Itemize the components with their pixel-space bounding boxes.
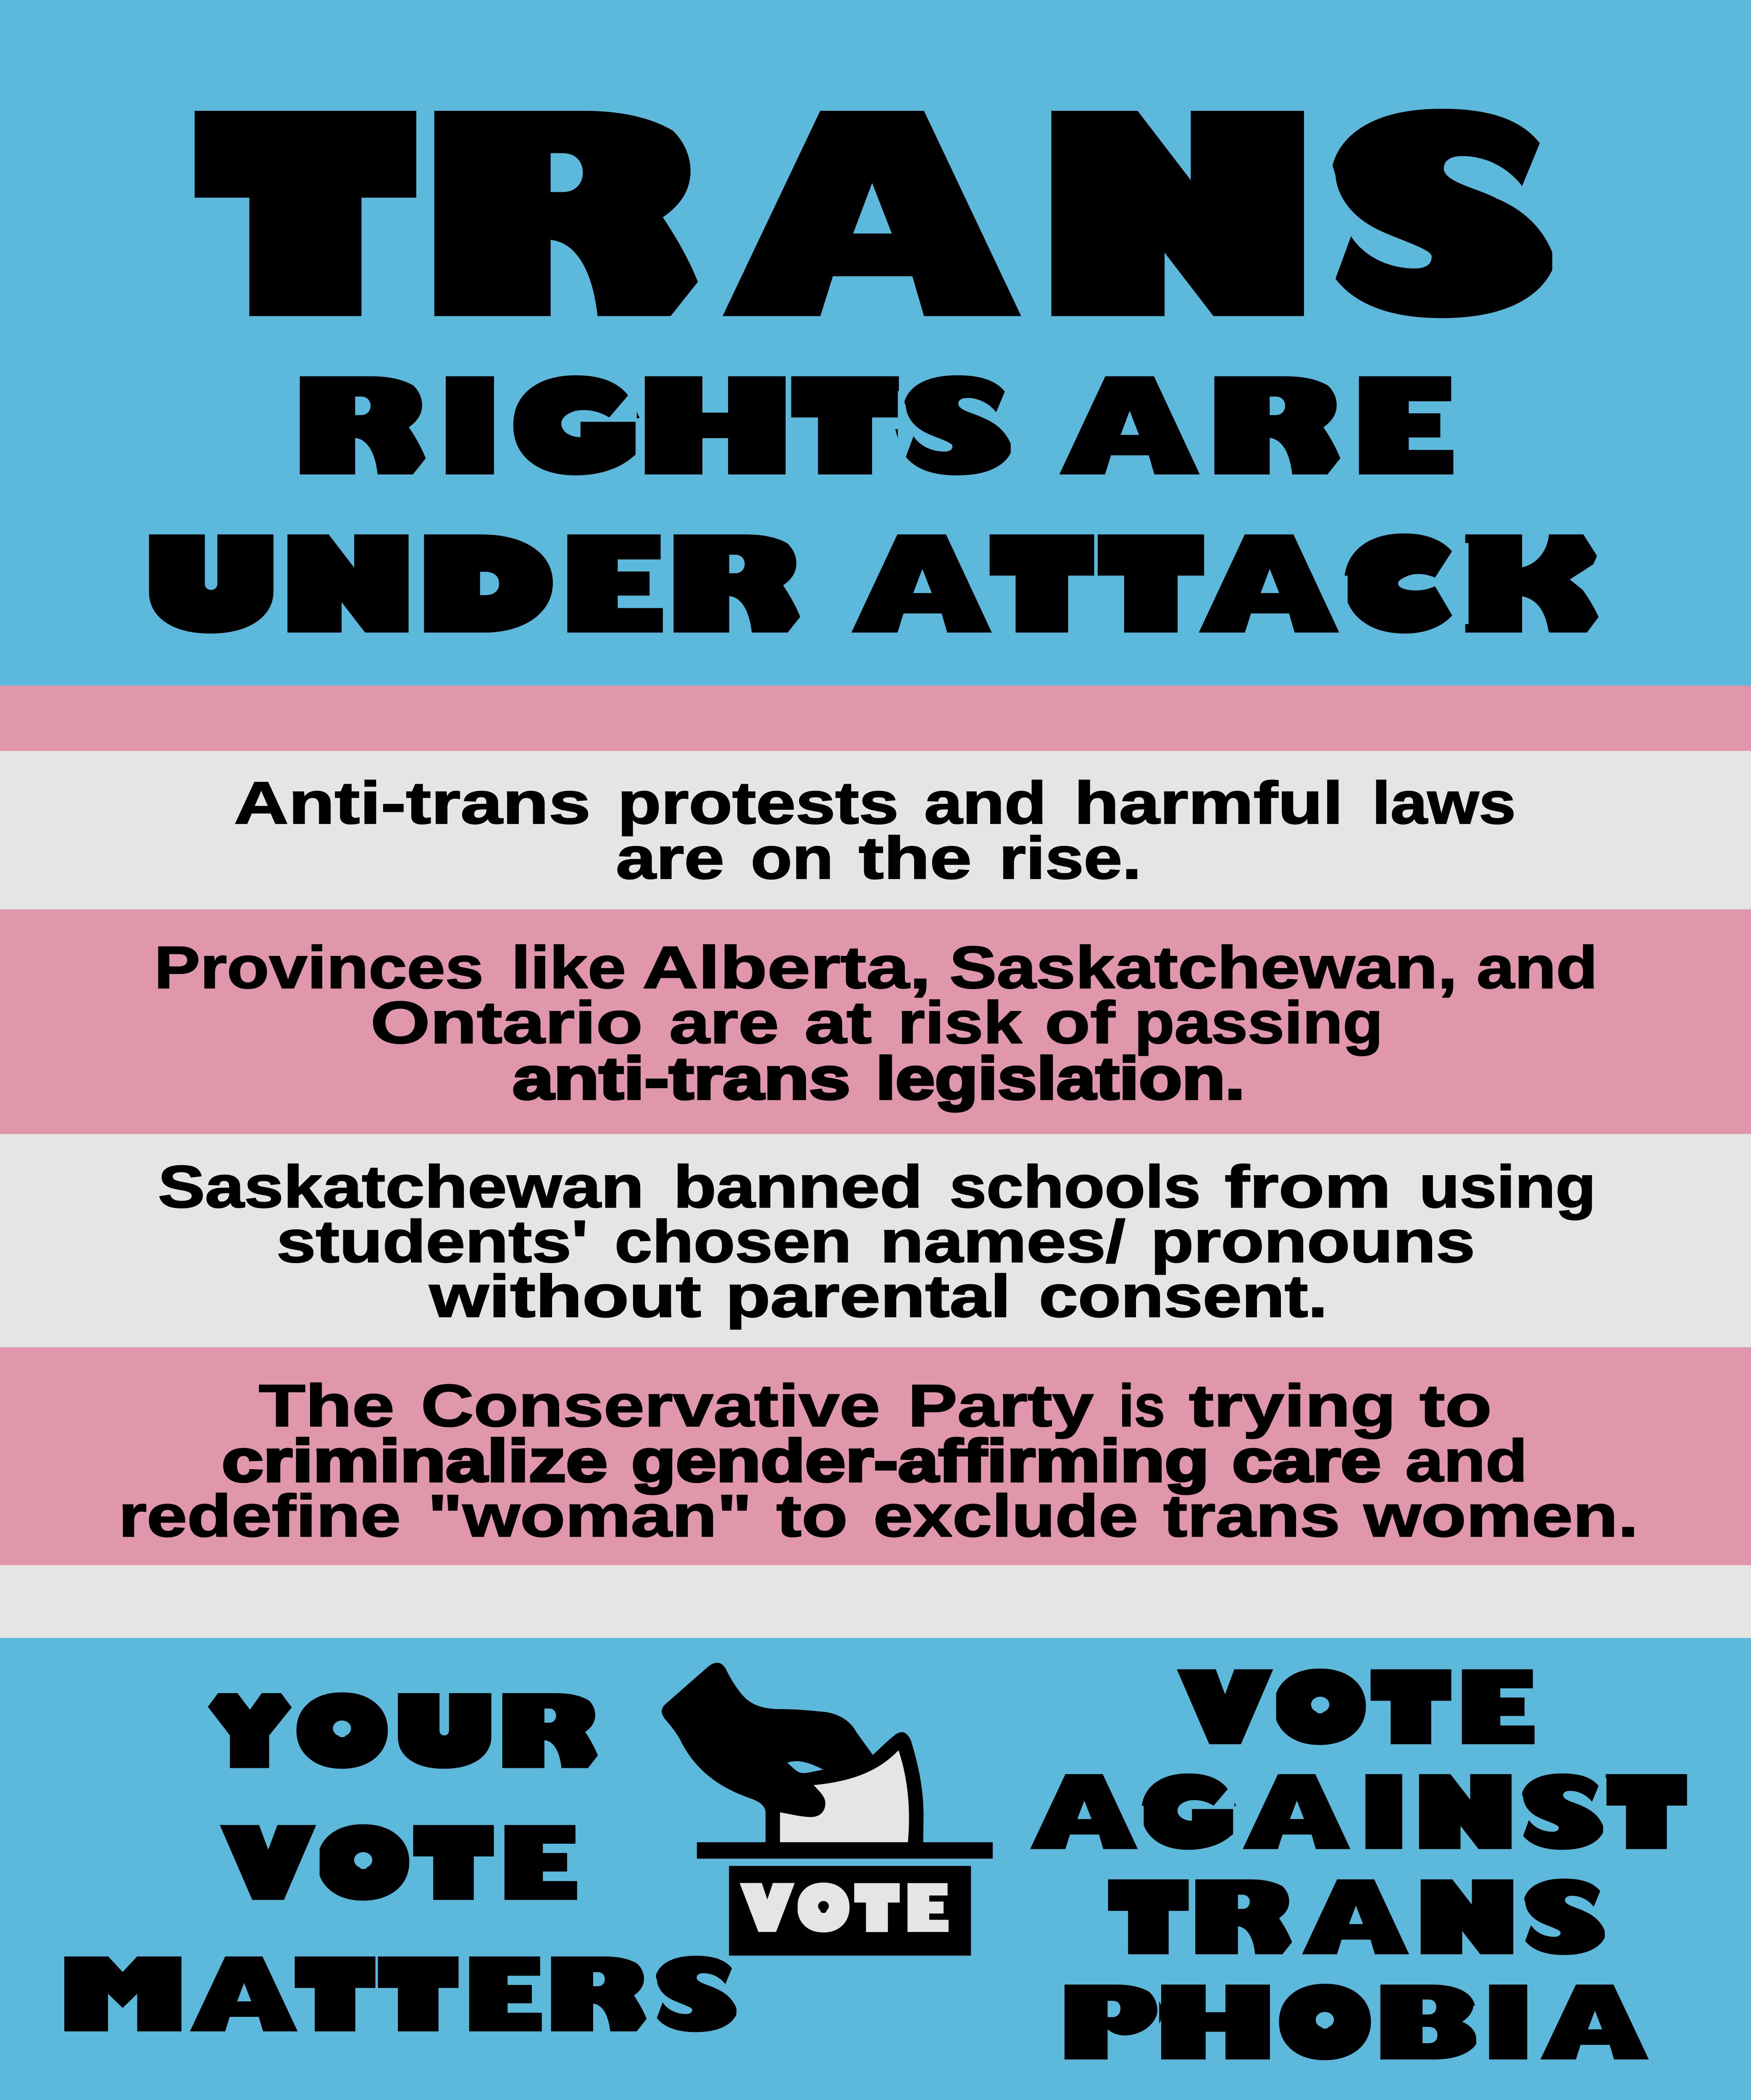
heading: vote against transphobia: S [1530,1769,1594,1853]
text: provinces line 3 emphasis: anti-trans [513,1045,850,1111]
text: conservative line 3: to [776,1482,848,1549]
title: TRANS: A [776,98,969,328]
icon: hand casting ballot into box: V [749,1879,785,1936]
text: provinces line 2: risk [898,989,1022,1056]
text: conservative line 2: criminalize [222,1427,607,1494]
heading: your vote matters: T [308,1952,363,2036]
title: TRANS: N [1076,98,1279,328]
heading: under attack: D [436,528,537,638]
text: provinces line 2: of [1045,989,1115,1056]
heading: vote against transphobia: O [1284,1664,1356,1749]
heading: under attack: U [162,528,261,638]
text: provinces line 1: and [1477,934,1598,1000]
title: TRANS [230,98,1566,328]
panel: saskatchewan ban [0,1134,1751,1347]
heading: your vote matters: Y [216,1688,283,1773]
text: provinces line 2: passing [1134,989,1383,1056]
text: protests line 1: laws [1372,769,1516,836]
heading: your vote matters: A [209,1952,279,2036]
heading: vote against transphobia [1025,1664,1674,2064]
heading: rights are: E [1368,370,1441,480]
heading: under attack: T [1006,528,1078,638]
heading: your vote matters [74,1688,741,2036]
heading: vote against transphobia: R [1205,1874,1285,1959]
text: protests line 2: rise. [999,824,1141,891]
panel: provinces at risk [0,909,1751,1134]
heading: vote against transphobia: S [1532,1874,1596,1959]
title: TRANS: S [1355,98,1528,328]
text: protests line 1: harmful [1074,769,1343,836]
heading: under attack: E [577,528,650,638]
heading: vote against transphobia: A [1559,1979,1630,2064]
heading: vote against transphobia: N [1430,1874,1504,1959]
heading: vote against transphobia: E [1469,1664,1525,1749]
heading: vote against transphobia: B [1390,1979,1468,2064]
heading: vote against transphobia: H [1172,1979,1259,2064]
text: protests line 2: the [859,824,972,891]
text: saskatchewan line 3: without [429,1263,701,1329]
title: TRANS: T [230,98,381,328]
heading: rights are: S [915,370,999,480]
heading: your vote matters: V [239,1820,297,1904]
text: provinces line 2: are [669,989,779,1056]
text: conservative line 1: The [259,1372,394,1439]
heading: under attack: K [1478,528,1588,638]
icon: hand casting ballot into box: E [911,1879,944,1936]
heading: under attack: R [686,528,791,638]
heading: vote against transphobia: O [1289,1979,1361,2064]
heading: rights are: I [455,370,485,480]
text: saskatchewan line 3: parental [726,1263,1011,1329]
heading: rights are: R [1227,370,1330,480]
text: conservative line 1: trying [1189,1372,1396,1439]
text: conservative line 3: women. [1363,1482,1638,1549]
text: saskatchewan line 1: Saskatchewan [158,1153,644,1220]
heading: vote against transphobia: A [1321,1874,1391,1959]
text: saskatchewan line 1: banned [673,1153,923,1220]
text: conservative line 3: "woman" [428,1482,752,1549]
heading: your vote matters: U [408,1688,482,1773]
text: conservative line 1: is [1119,1372,1165,1439]
panel: conservative party [0,1347,1751,1565]
band: pink spacer stripe [0,685,1751,751]
text: saskatchewan line 2: pronouns [1151,1208,1475,1275]
text: provinces line 1: Provinces [154,934,484,1000]
heading: vote against transphobia: P [1074,1979,1149,2064]
text: provinces line 3 emphasis: legislation. [876,1045,1245,1111]
text: protests line 2: are [616,824,724,891]
icon: hand casting ballot into box [662,1663,993,1956]
text: conservative line 3: redefine [118,1482,401,1549]
heading: vote against transphobia: A [1262,1769,1332,1853]
heading: under attack: T [1115,528,1187,638]
heading: rights are: R [312,370,416,480]
text: provinces line 2: Ontario [371,989,643,1056]
heading: your vote matters: S [664,1952,728,2036]
heading: under attack: A [1223,528,1315,638]
heading: under attack [162,528,1625,638]
text: conservative line 1: Conservative [421,1372,880,1439]
text: protests line 1: Anti-trans [234,769,591,836]
text: provinces line 1: Alberta, [642,934,931,1000]
heading: vote against transphobia: T [1121,1874,1176,1959]
text: conservative line 3: exclude [873,1482,1138,1549]
icon: hand casting ballot into box: O [802,1879,844,1936]
text: conservative line 3: trans [1163,1482,1340,1549]
heading: under attack: C [1358,528,1446,638]
text: provinces line 1: like [511,934,626,1000]
text: conservative line 2: gender-affirming [631,1427,1209,1494]
heading: vote against transphobia: T [1383,1664,1438,1749]
heading: your vote matters: O [307,1688,378,1773]
text: conservative line 1: to [1420,1372,1492,1439]
heading: vote against transphobia: G [1152,1769,1225,1853]
panel: call to action [0,1638,1751,2100]
heading: your vote matters: M [74,1952,171,2036]
heading: your vote matters: E [512,1820,568,1904]
heading: vote against transphobia: I [1372,1769,1395,1853]
text: protests line 1: and [924,769,1046,836]
heading: vote against transphobia: T [1619,1769,1674,1853]
title: TRANS: R [461,98,677,328]
text: conservative line 2: and [1405,1427,1528,1494]
heading: your vote matters: O [328,1820,399,1904]
text: conservative line 2: care [1232,1427,1381,1494]
text: saskatchewan line 3: consent. [1039,1263,1328,1329]
text: saskatchewan line 1: using [1419,1153,1596,1220]
heading: rights are: G [527,370,624,480]
heading: your vote matters: E [476,1952,532,2036]
text: saskatchewan line 2: students' [276,1208,588,1275]
heading: rights are [312,370,1456,480]
text: provinces line 1: Saskatchewan, [949,934,1457,1000]
heading: vote against transphobia: A [1049,1769,1119,1853]
text: saskatchewan line 2: names/ [880,1208,1125,1275]
panel: headline [0,0,1751,685]
heading: vote against transphobia: I [1496,1979,1520,2064]
heading: your vote matters: R [560,1952,639,2036]
text: saskatchewan line 1: from [1225,1153,1391,1220]
heading: your vote matters: T [391,1952,446,2036]
heading: rights are: T [808,370,882,480]
heading: your vote matters: R [512,1688,590,1773]
text: saskatchewan line 2: chosen [615,1208,852,1275]
text: provinces line 2: at [805,989,872,1056]
band: light spacer stripe [0,1565,1751,1638]
text: protests line 1: protests [618,769,899,836]
text: protests line 2: on [751,824,833,891]
heading: vote against transphobia: V [1196,1664,1254,1749]
text: conservative line 1: Party [908,1372,1094,1439]
heading: under attack: A [876,528,968,638]
text: saskatchewan line 1: schools [949,1153,1201,1220]
heading: under attack: N [299,528,397,638]
heading: vote against transphobia: N [1428,1769,1503,1853]
heading: rights are: H [658,370,772,480]
heading: rights are: A [1084,370,1175,480]
icon: hand casting ballot into box: T [861,1879,893,1936]
heading: your vote matters: T [426,1820,481,1904]
panel: protests and laws [0,751,1751,909]
